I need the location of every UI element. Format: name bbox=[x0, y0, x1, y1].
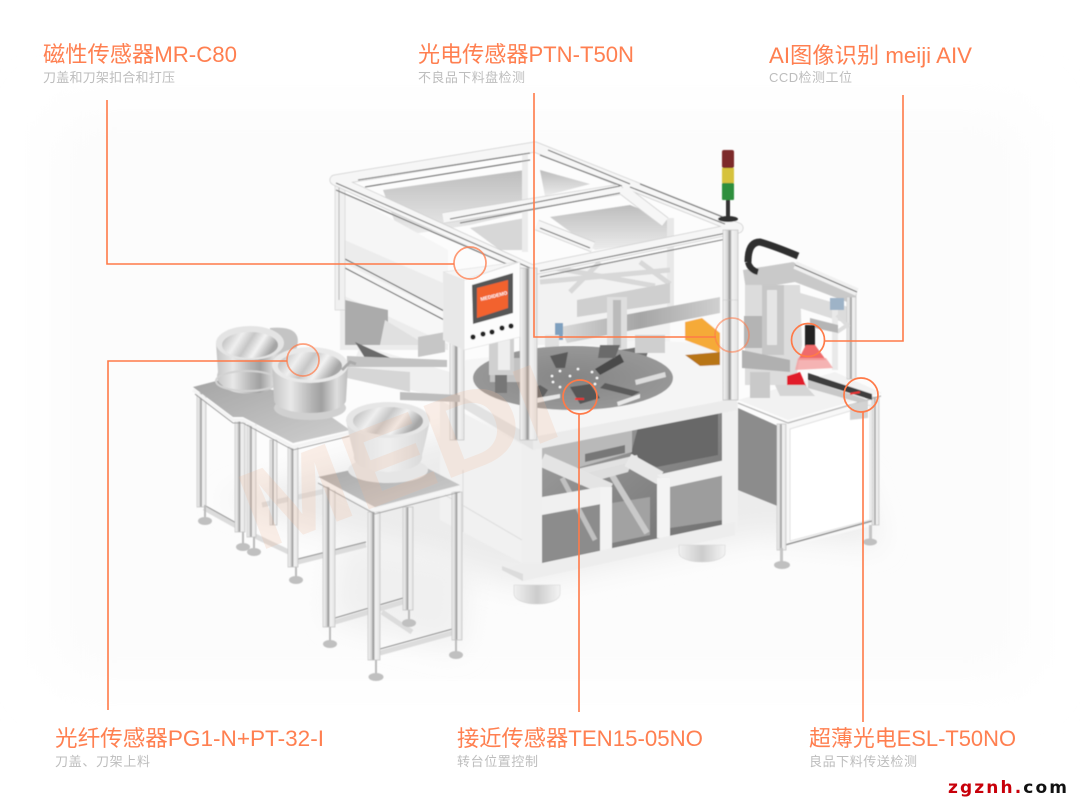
leader line bbox=[825, 95, 903, 341]
marker circle bbox=[792, 324, 824, 356]
leader line bbox=[862, 412, 864, 722]
marker circle bbox=[563, 380, 597, 414]
source watermark: zgznh.com bbox=[948, 778, 1067, 798]
marker circle bbox=[844, 378, 878, 412]
internal rails and actuators bbox=[540, 262, 720, 366]
screen: MEDIDEMO bbox=[480, 290, 508, 303]
left interior of enclosure bbox=[335, 180, 464, 440]
title: 磁性传感器MR-C80 bbox=[43, 42, 237, 67]
feeder tops for tables 1 and 2 bbox=[193, 380, 350, 450]
main machine: front columns bbox=[520, 230, 738, 440]
title: 光纤传感器PG1-N+PT-32-I bbox=[55, 726, 324, 751]
title: AI图像识别 meiji AIV bbox=[769, 43, 972, 68]
turntable bbox=[473, 345, 673, 410]
main machine: table top bbox=[463, 340, 737, 450]
callout: fibre sensor bbox=[55, 344, 324, 769]
module above turntable bbox=[489, 337, 514, 393]
main machine: enclosure back panels bbox=[383, 147, 723, 345]
vibratory bowl 2 bbox=[272, 347, 356, 420]
subtitle: 转台位置控制 bbox=[457, 754, 538, 769]
leader line bbox=[578, 414, 580, 712]
leader line bbox=[534, 93, 716, 337]
feeder table 3 legs and frame bbox=[318, 458, 463, 681]
vibratory bowl 1 bbox=[216, 326, 298, 394]
main machine: top frame bbox=[335, 147, 738, 277]
leader line bbox=[108, 361, 287, 710]
callout: magnetic sensor bbox=[43, 42, 486, 279]
vibratory bowl 3 bbox=[346, 402, 430, 483]
marker circle bbox=[715, 318, 749, 352]
feeder rails bbox=[347, 356, 460, 402]
control box with screen bbox=[443, 262, 520, 350]
subtitle: CCD检测工位 bbox=[769, 70, 852, 85]
subtitle: 良品下料传送检测 bbox=[809, 754, 917, 769]
callout: ultra-thin photoelectric sensor bbox=[809, 378, 1016, 769]
subtitle: 不良品下料盘检测 bbox=[418, 70, 525, 85]
machine illustration bbox=[193, 147, 882, 681]
feeder table 1 bbox=[197, 393, 250, 551]
right station: cabinet bbox=[738, 372, 882, 569]
title: 超薄光电ESL-T50NO bbox=[809, 726, 1016, 751]
title: 光电传感器PTN-T50N bbox=[418, 42, 634, 67]
callout: photoelectric sensor bbox=[418, 42, 749, 352]
subtitle: 刀盖、刀架上料 bbox=[55, 754, 150, 769]
brand watermark: MEDI bbox=[222, 339, 575, 574]
feeder table 2 bbox=[247, 425, 366, 584]
main machine: lower base bbox=[440, 400, 738, 581]
callout: AI vision bbox=[769, 43, 972, 356]
callout: proximity sensor bbox=[457, 380, 703, 769]
main machine: round feet bbox=[514, 545, 725, 604]
right station: gantry and camera bbox=[742, 242, 872, 420]
subtitle: 刀盖和刀架扣合和打压 bbox=[43, 70, 175, 85]
marker circle bbox=[454, 247, 486, 279]
leader line bbox=[107, 100, 454, 264]
marker circle bbox=[287, 344, 319, 376]
ground backdrop bbox=[50, 110, 1030, 680]
front column overlay bbox=[723, 300, 738, 400]
title: 接近传感器TEN15-05NO bbox=[457, 726, 703, 751]
stack light bbox=[718, 150, 738, 222]
